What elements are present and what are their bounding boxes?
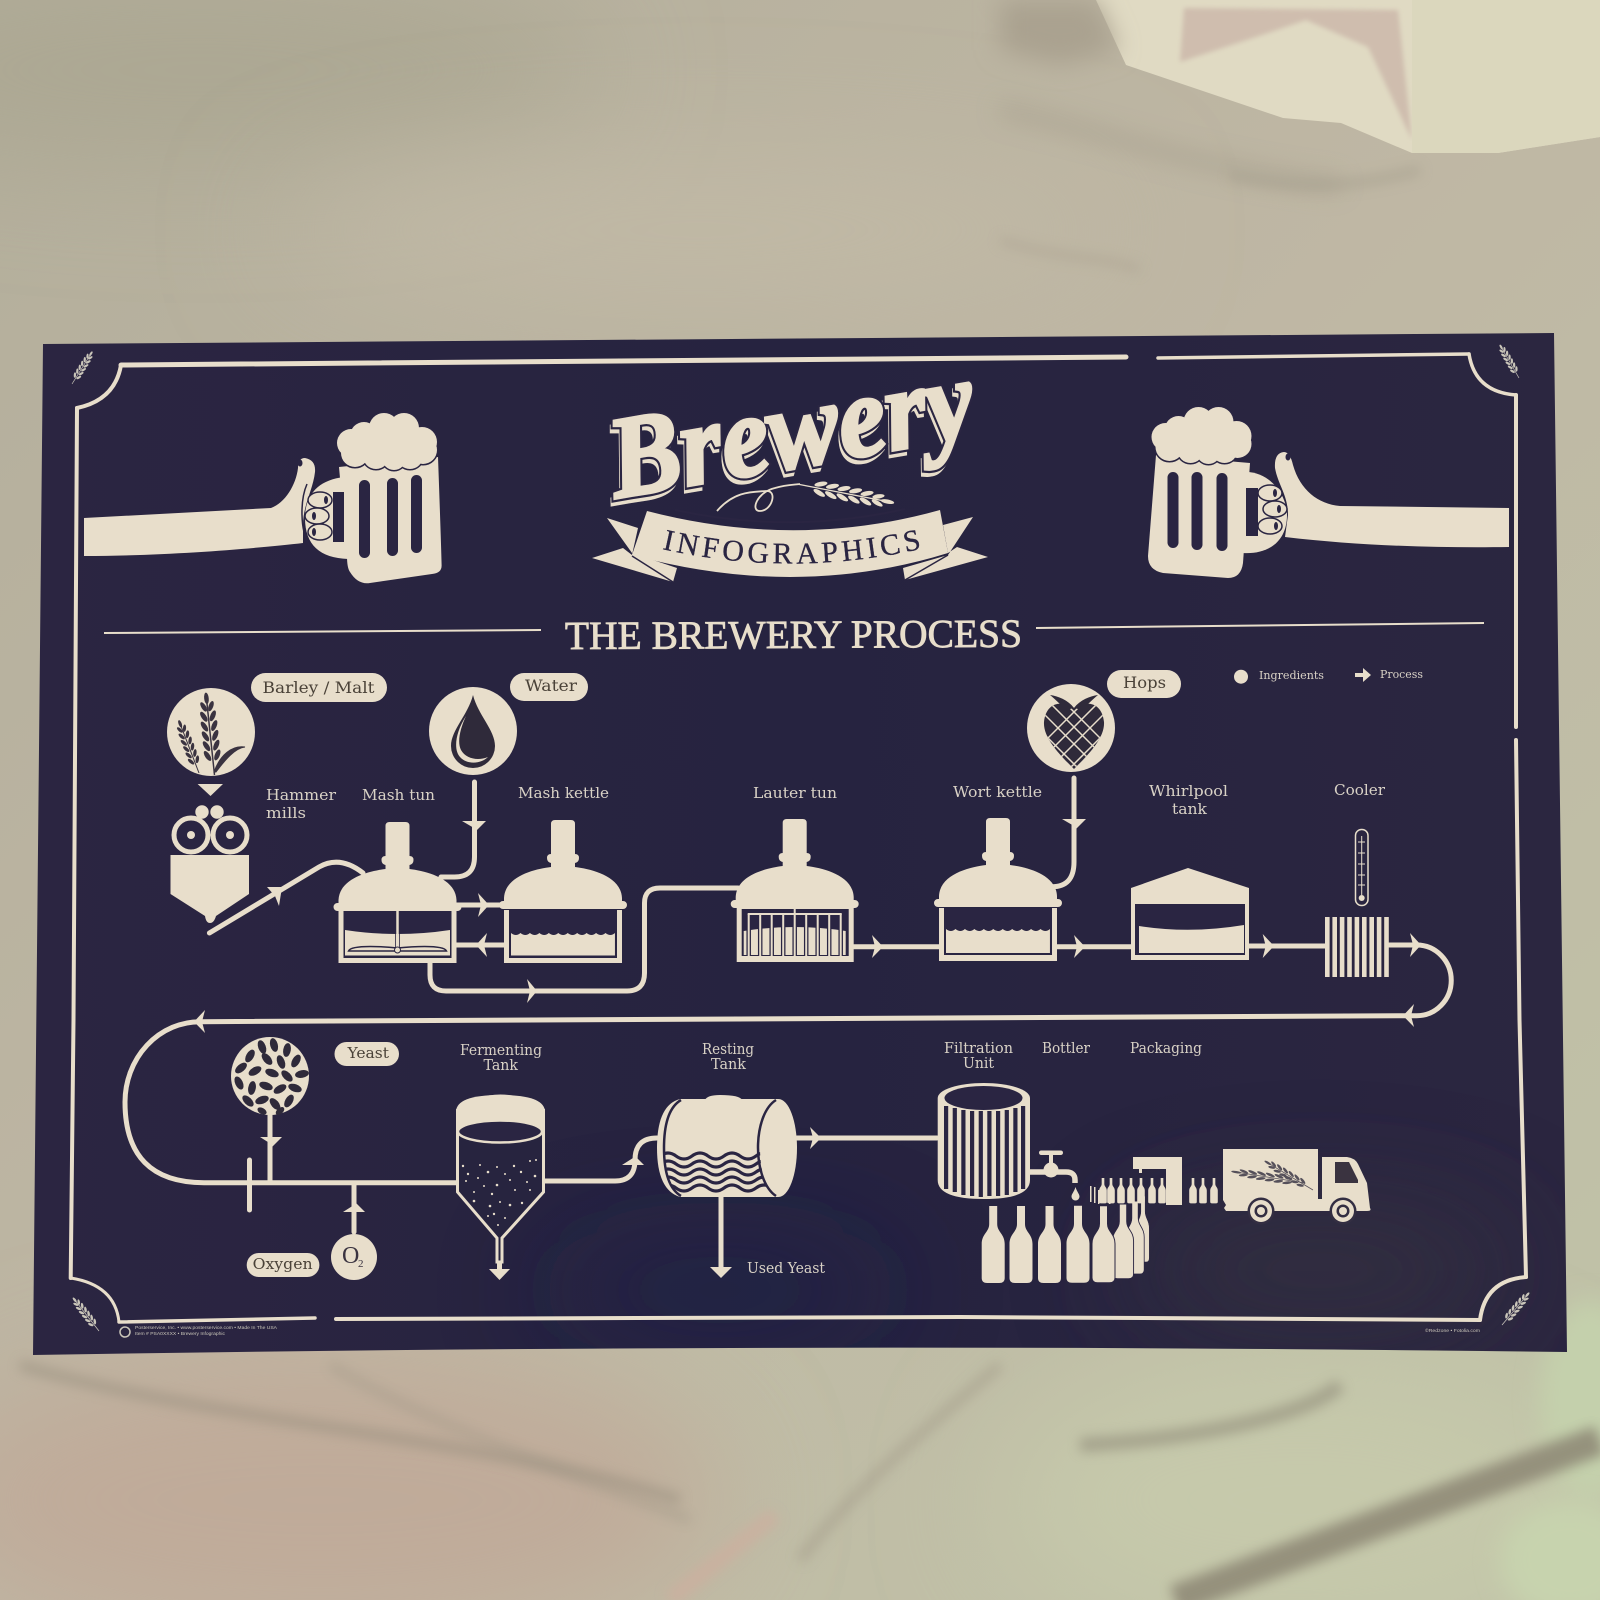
icon: corner wheat top right <box>1496 342 1523 380</box>
legend: Ingredients <box>1259 669 1324 682</box>
process labels: Bottler <box>1042 1039 1091 1057</box>
ingredient: water <box>429 673 588 775</box>
process labels: Mash kettle <box>518 784 609 802</box>
vessel: mash tun <box>334 822 462 963</box>
process labels: Tank <box>711 1055 747 1073</box>
ingredient: oxygen: O <box>342 1243 359 1269</box>
icon: right arm holding beer mug <box>1148 407 1509 578</box>
footer small print: Item # PSA0XXXX • Brewery Infographic <box>135 1331 226 1336</box>
ingredient: oxygen: Oxygen <box>253 1255 313 1273</box>
paper crumple top right <box>1000 0 1600 153</box>
legend: Process <box>1380 668 1423 681</box>
icon: corner wheat bottom right <box>1498 1289 1533 1328</box>
ingredient: hops <box>1027 670 1181 774</box>
ingredient: hops: Hops <box>1123 673 1166 692</box>
decorative frame <box>71 354 1526 1322</box>
vessel: resting tank <box>657 1095 797 1197</box>
banner: Infographics ribbon <box>592 510 988 582</box>
arrows <box>194 819 1421 1280</box>
vessel: whirlpool tank <box>1131 868 1249 960</box>
ingredient: oxygen <box>247 1234 377 1280</box>
process labels: Hammer <box>266 786 337 804</box>
title: Brewery: Brewery <box>597 335 984 524</box>
icon: left arm holding beer mug <box>84 413 442 583</box>
process labels: tank <box>1172 800 1208 818</box>
process labels: Resting <box>702 1040 754 1058</box>
ingredient: oxygen: 2 <box>358 1258 364 1270</box>
ingredient: yeast: Yeast <box>346 1044 389 1062</box>
heading: The Brewery Process <box>104 611 1484 658</box>
process pipes <box>125 778 1451 1270</box>
bottling line: bottles <box>982 1178 1218 1283</box>
vessel: fermenting tank <box>456 1095 545 1262</box>
vessel: mash kettle <box>499 820 627 963</box>
process labels: Packaging <box>1130 1039 1202 1057</box>
process labels: Used Yeast <box>747 1259 825 1277</box>
panel: dark poster <box>33 333 1567 1355</box>
title: Brewery: Brewery <box>597 335 984 524</box>
vessel: cooler with thermometer <box>1325 830 1389 977</box>
process labels: Unit <box>963 1054 994 1072</box>
process labels: Filtration <box>944 1039 1013 1057</box>
process labels <box>266 781 1386 1277</box>
footer small print: Posterservice, Inc. • www.posterservice.com • Made In The USA <box>135 1325 277 1330</box>
ingredient: water: Water <box>525 676 577 695</box>
footer small print: ©Redzone • Fotolia.com <box>1425 1327 1480 1333</box>
banner: Infographics ribbon: INFOGRAPHICS <box>662 530 920 564</box>
vessel: lauter tun <box>731 819 859 962</box>
icon: delivery truck <box>1223 1149 1371 1224</box>
process labels: Mash tun <box>362 786 435 804</box>
icon: packaging machine <box>1133 1157 1182 1205</box>
icon: faucet and drop <box>1030 1150 1080 1200</box>
process labels: Whirlpool <box>1149 782 1228 800</box>
process labels: mills <box>266 804 306 822</box>
icon: hammer mills <box>170 805 249 923</box>
icon: corner wheat bottom left <box>69 1294 103 1334</box>
process labels: Tank <box>484 1056 519 1074</box>
legend <box>1234 668 1423 684</box>
process labels: Wort kettle <box>953 783 1042 801</box>
ingredient: yeast <box>231 1037 399 1117</box>
process labels: Cooler <box>1334 781 1386 799</box>
vessel: wort kettle <box>934 818 1062 961</box>
icon: corner wheat top left <box>68 349 96 386</box>
process labels: Lauter tun <box>753 784 837 802</box>
ingredient: barley / malt <box>167 673 387 796</box>
ingredient: barley / malt: Barley / Malt <box>262 678 375 697</box>
vessel: filtration unit <box>938 1083 1030 1199</box>
footer small print <box>120 1325 1480 1337</box>
title: Brewery: Brewery <box>595 340 981 529</box>
icon: title wheat sprig <box>717 475 896 512</box>
heading: The Brewery Process: THE BREWERY PROCESS <box>565 611 1022 658</box>
process labels: Fermenting <box>460 1041 542 1059</box>
